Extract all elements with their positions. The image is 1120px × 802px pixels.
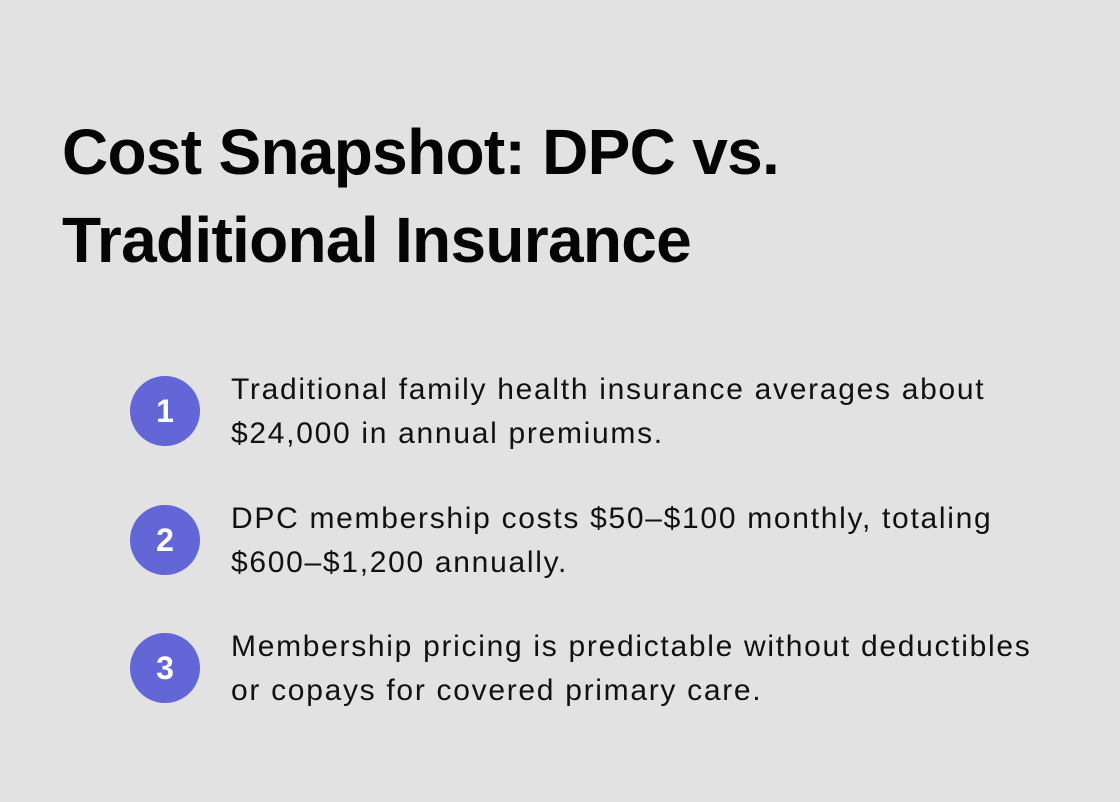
title bbox=[62, 116, 779, 276]
icon: number 2 circle bbox=[130, 505, 200, 575]
text 3 bbox=[231, 630, 1031, 707]
icon: number 1 circle: 1 bbox=[156, 393, 174, 429]
title: Cost Snapshot: DPC vs. bbox=[62, 116, 779, 188]
text 1: Traditional family health insurance averages about bbox=[231, 373, 985, 406]
text 3: Membership pricing is predictable without deductibles bbox=[231, 630, 1031, 663]
item 3 bbox=[130, 630, 1031, 707]
text 2: DPC membership costs $50–$100 monthly, totaling bbox=[231, 502, 992, 535]
text 2 bbox=[231, 502, 992, 579]
item 1 bbox=[130, 373, 985, 450]
icon: number 2 circle: 2 bbox=[156, 522, 174, 558]
title: Traditional Insurance bbox=[62, 204, 691, 276]
icon: number 3 circle: 3 bbox=[156, 650, 174, 686]
text 1 bbox=[231, 373, 985, 450]
text 1: $24,000 in annual premiums. bbox=[231, 417, 664, 450]
item 2 bbox=[130, 502, 992, 579]
icon: number 3 circle bbox=[130, 633, 200, 703]
icon: number 1 circle bbox=[130, 376, 200, 446]
text 3: or copays for covered primary care. bbox=[231, 674, 762, 707]
text 2: $600–$1,200 annually. bbox=[231, 546, 568, 579]
